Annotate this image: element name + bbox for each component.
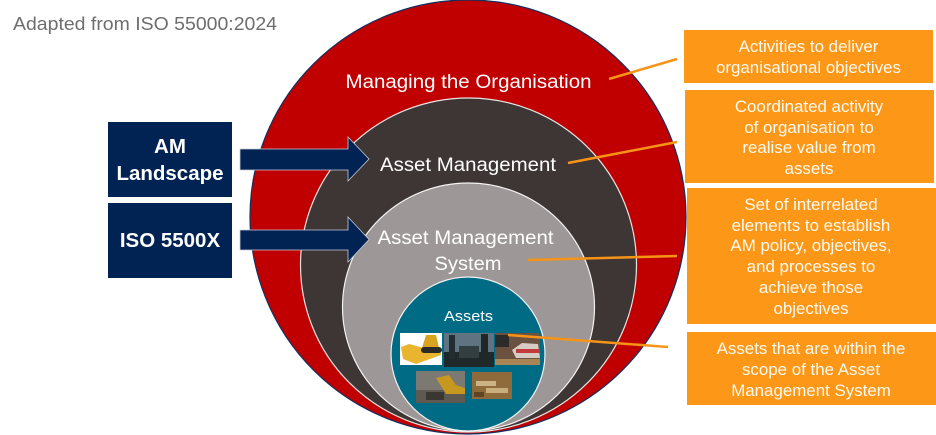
box: AM Landscape bbox=[108, 122, 232, 197]
source note: Adapted from ISO 55000:2024 bbox=[13, 14, 277, 34]
callout: asset management: Coordinated activity bbox=[735, 97, 884, 116]
callout: organisation bbox=[684, 30, 933, 83]
photo: refinery bbox=[444, 333, 494, 367]
label: asset management system: Asset Management bbox=[378, 228, 554, 249]
box: AM Landscape: AM bbox=[154, 135, 186, 158]
circle: managing the organisation bbox=[250, 0, 686, 434]
arrow: ISO 5500X to Asset Management System bbox=[240, 217, 369, 262]
callout: management system: elements to establish bbox=[732, 216, 890, 235]
arrow: AM Landscape to Asset Management bbox=[240, 137, 369, 181]
leader line: assets bbox=[508, 335, 668, 347]
label: assets: Assets bbox=[444, 308, 493, 325]
label: asset management system: System bbox=[434, 254, 502, 275]
photo: train bbox=[495, 333, 540, 365]
leader line: organisation bbox=[609, 59, 677, 79]
label: asset management system bbox=[378, 228, 554, 275]
callout: management system: and processes to bbox=[747, 257, 875, 276]
callout: asset management: assets bbox=[785, 159, 833, 178]
label: asset management: Asset Management bbox=[380, 155, 557, 176]
box: ISO 5500X bbox=[108, 203, 232, 278]
callout: management system: AM policy, objectives, bbox=[730, 236, 892, 255]
leader line: management system bbox=[528, 256, 677, 260]
callout: asset management: realise value from bbox=[742, 138, 876, 157]
photo: rock site bbox=[472, 372, 512, 399]
callout: assets bbox=[687, 332, 936, 405]
circle: asset management system bbox=[342, 183, 594, 431]
callout: assets: Assets that are within the bbox=[717, 339, 905, 358]
circle: assets bbox=[391, 277, 545, 431]
callout: assets: scope of the Asset bbox=[742, 360, 880, 379]
callout: organisation: Activities to deliver bbox=[739, 37, 879, 56]
callout: management system bbox=[687, 188, 936, 324]
callout: assets: Management System bbox=[731, 381, 891, 400]
box: ISO 5500X: ISO 5500X bbox=[120, 229, 220, 252]
callout: organisation: organisational objectives bbox=[716, 58, 901, 77]
callout: asset management bbox=[685, 90, 934, 183]
callout: management system: achieve those bbox=[759, 278, 863, 297]
circle: asset management bbox=[300, 98, 636, 432]
callout: asset management: of organisation to bbox=[744, 118, 874, 137]
photo: mine excavator bbox=[416, 371, 465, 403]
callout: management system: objectives bbox=[773, 299, 849, 318]
callout: management system: Set of interrelated bbox=[744, 195, 878, 214]
photo: bulldozer bbox=[400, 333, 442, 365]
leader line: asset management bbox=[568, 142, 677, 163]
label: managing the organisation: Managing the Organisation bbox=[346, 72, 592, 93]
box: AM Landscape: Landscape bbox=[116, 162, 224, 185]
